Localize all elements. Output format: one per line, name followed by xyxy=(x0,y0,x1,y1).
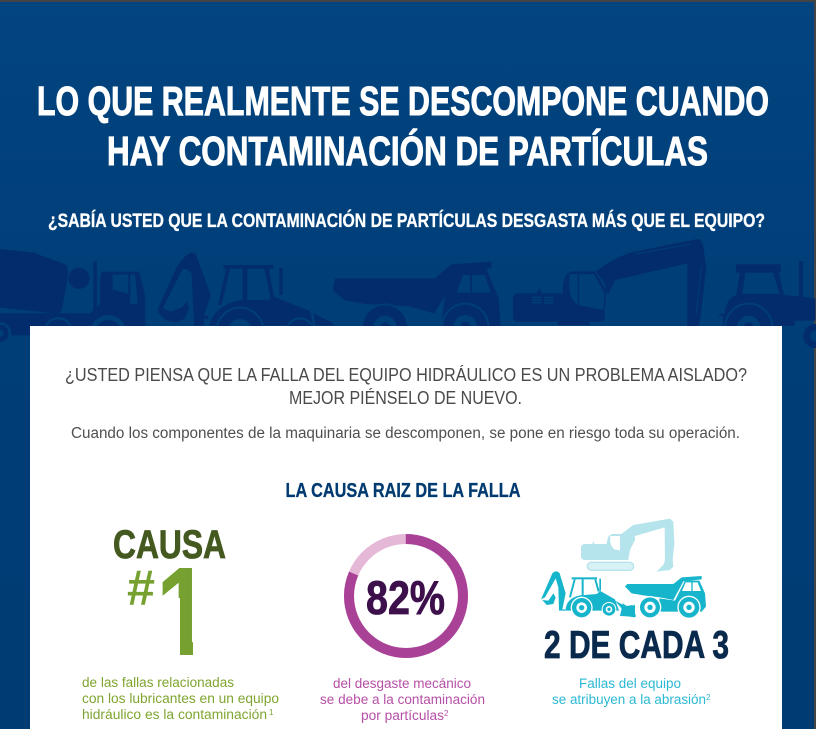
caption: de las fallas relacionadas xyxy=(82,675,234,690)
caption: hidráulico es la contaminación xyxy=(82,707,267,722)
percentage: 82% xyxy=(366,571,445,624)
icon: teal dump truck xyxy=(620,576,706,619)
icon: tractor xyxy=(719,261,816,352)
intro paragraph: Cuando los componentes de la maquinaria se descomponen, se pone en riesgo toda su operación. xyxy=(71,425,740,442)
stat: 2 de cada 3 xyxy=(541,519,729,707)
icon: backhoe loader xyxy=(157,253,335,355)
caption: 1 xyxy=(269,708,274,717)
stat: causa #1 xyxy=(82,523,279,722)
machinery silhouettes: left xyxy=(0,249,409,355)
donut chart xyxy=(349,539,463,653)
caption: se atribuyen a la abrasión xyxy=(552,692,706,707)
caption: se debe a la contaminación xyxy=(320,692,485,707)
caption: Fallas del equipo xyxy=(579,676,681,691)
number one: 1 xyxy=(156,541,210,682)
panel: white content xyxy=(30,326,782,729)
caption xyxy=(320,676,485,723)
caption: con los lubricantes en un equipo xyxy=(82,691,279,706)
machinery silhouettes: right xyxy=(408,239,816,352)
intro question: MEJOR PIÉNSELO DE NUEVO. xyxy=(289,387,522,408)
intro question xyxy=(65,364,747,408)
title xyxy=(37,78,769,174)
causa label: CAUSA xyxy=(113,523,226,567)
caption: 2 xyxy=(444,709,449,718)
icon: teal backhoe xyxy=(541,571,635,619)
caption: 2 xyxy=(706,693,711,702)
caption: por partículas xyxy=(361,708,444,723)
icon: dump truck cab xyxy=(408,262,501,351)
stat: 82% xyxy=(320,539,485,723)
section heading: LA CAUSA RAIZ DE LA FALLA xyxy=(286,480,520,502)
icon: excavator xyxy=(513,239,706,326)
icon: dump truck bed xyxy=(333,278,409,351)
caption xyxy=(552,676,711,707)
caption: del desgaste mecánico xyxy=(333,676,471,691)
hash sign: # xyxy=(127,560,155,616)
big stat: 2 DE CADA 3 xyxy=(544,624,729,667)
caption xyxy=(82,675,279,722)
icon: light excavator xyxy=(581,519,674,572)
icon: concrete mixer truck xyxy=(0,249,145,352)
